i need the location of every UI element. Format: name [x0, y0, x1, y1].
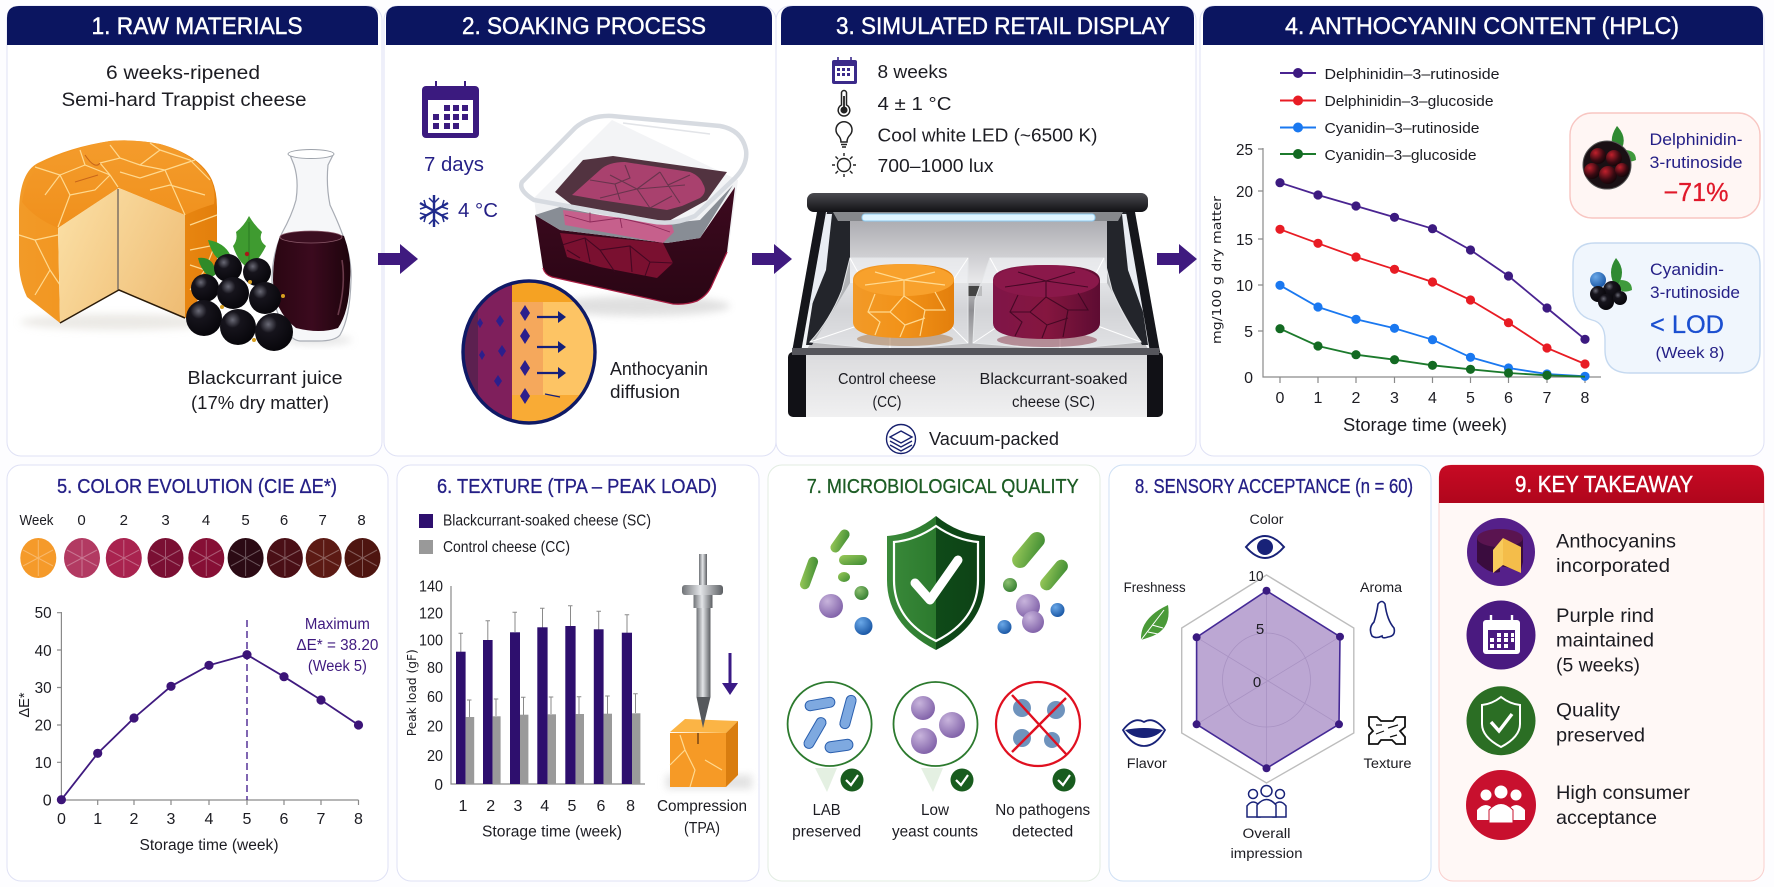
line chart: delta E over storage: 3 [167, 811, 176, 828]
colour swatches: cheese discs by week [20, 538, 381, 578]
arrow: retail display to HPLC [1157, 244, 1197, 274]
annotation: maximum delta E: ΔE* = 38.20 [296, 637, 379, 654]
line chart: delta E over storage: 0 [43, 792, 52, 810]
line chart: delta E over storage [17, 605, 363, 854]
line chart: delta E over storage: 6 [280, 811, 289, 828]
line chart: anthocyanin content over storage: 0 [1276, 390, 1285, 407]
text: takeaway 4 [1556, 782, 1691, 829]
radar axis: freshness [1124, 580, 1186, 640]
text: takeaway 2: (5 weeks) [1556, 655, 1640, 677]
icon: light bulb [836, 122, 852, 147]
icon: anthocyanins incorporated [1467, 518, 1535, 586]
line chart: anthocyanin content over storage: 20 [1236, 184, 1253, 201]
bar chart: peak load: 4 [540, 798, 549, 815]
radar axis: overall impression [1230, 786, 1302, 861]
illustration: anthocyanin diffusion magnifier [460, 280, 598, 425]
radar axis: freshness: Freshness [1124, 580, 1186, 595]
icon: red-tinted berries [1583, 126, 1636, 189]
text: diffusion label [610, 359, 708, 402]
text: takeaway 2 [1556, 605, 1654, 677]
week labels: 4 [202, 512, 210, 529]
radar axis: overall impression: Overall [1242, 826, 1290, 841]
line chart: anthocyanin content over storage: 5 [1244, 324, 1253, 341]
week labels: 8 [357, 512, 366, 529]
line chart: delta E over storage: 4 [205, 811, 214, 828]
illustration: blackcurrant juice carafe [272, 150, 352, 345]
line chart: delta E over storage: 8 [354, 811, 363, 828]
text: compression label: (TPA) [684, 820, 720, 837]
bar chart: peak load: 60 [427, 689, 443, 706]
text: microbiology labels: LAB [813, 802, 841, 819]
bar chart: peak load: 6 [597, 798, 606, 815]
line chart: anthocyanin content over storage: 8 [1581, 390, 1590, 407]
line chart: delta E over storage: 50 [35, 605, 52, 622]
series: cyanidin-3-glucoside [1275, 324, 1585, 380]
panel: 3. simulated retail display [776, 6, 1196, 456]
text: microbiology labels: No pathogens [995, 802, 1090, 819]
text: delphinidin reduction value [1650, 130, 1742, 207]
radar axis: texture [1364, 717, 1412, 771]
text: takeaway 3: Quality [1556, 700, 1620, 722]
week labels: 2 [120, 512, 128, 529]
legend: texture bars: Blackcurrant-soaked cheese (SC) [443, 512, 651, 530]
arrow: soaking to retail display [752, 244, 792, 274]
icon: quality shield [1466, 686, 1536, 755]
legend: anthocyanin series: Delphinidin–3–rutinoside [1324, 66, 1500, 83]
heading: anthocyanin content: 4. ANTHOCYANIN CONTENT (HPLC) [1285, 13, 1679, 40]
week labels [20, 512, 366, 529]
icon: thermometer [838, 90, 850, 116]
radar axis: color: Color [1250, 512, 1284, 527]
text: display labels: (CC) [872, 394, 902, 411]
bar chart: peak load: 3 [514, 798, 523, 815]
text: takeaway 4: High consumer [1556, 782, 1691, 804]
legend: anthocyanin series: Cyanidin–3–rutinoside [1324, 120, 1480, 137]
line chart: anthocyanin content over storage: 25 [1236, 142, 1253, 159]
callout: delphinidin reduction [1570, 113, 1760, 218]
text: takeaway 4: acceptance [1556, 807, 1657, 829]
panel: 8. sensory acceptance [1109, 465, 1431, 881]
icon: vacuum-packed layers [886, 424, 916, 454]
line chart: delta E over storage: 40 [35, 643, 52, 660]
annotation: maximum delta E: (Week 5) [308, 658, 367, 675]
line chart: anthocyanin content over storage: 2 [1352, 390, 1361, 407]
heading: simulated retail display: 3. SIMULATED RETAIL DISPLAY [836, 13, 1170, 40]
panel: 9. key takeaway [1439, 465, 1764, 881]
icon: no pathogens [996, 682, 1080, 792]
radar axis: flavor: Flavor [1127, 756, 1167, 771]
text: microbiology labels: preserved [792, 824, 861, 841]
illustration: cheese wheel with cut wedge [19, 140, 220, 330]
text: delphinidin reduction value: Delphinidin- [1650, 130, 1742, 149]
text: cheese description [62, 62, 306, 111]
bar chart: peak load: 140 [419, 578, 443, 596]
panel: 5. color evolution [7, 465, 388, 881]
line chart: anthocyanin content over storage: 15 [1236, 232, 1253, 249]
legend: anthocyanin series: Delphinidin–3–glucoside [1324, 93, 1494, 110]
radar axis: color [1246, 512, 1284, 558]
legend: texture bars: Control cheese (CC) [443, 539, 570, 556]
text: LED type: Cool white LED (~6500 K) [878, 124, 1098, 146]
bar chart: peak load: 20 [427, 748, 443, 765]
icon: purple rind calendar [1466, 600, 1536, 670]
line chart: anthocyanin content over storage: mg/100 g dry matter [1209, 195, 1224, 344]
bar chart: peak load: 120 [419, 606, 443, 622]
legend: anthocyanin series [1280, 66, 1500, 164]
radar axis: texture: Texture [1364, 756, 1412, 771]
line chart: delta E over storage: 5 [243, 811, 252, 828]
icon: microbes left group [798, 527, 872, 635]
text: cyanidin below LOD value: < LOD [1650, 311, 1724, 339]
text: juice label [188, 367, 342, 413]
text: takeaway 1 [1556, 531, 1676, 577]
arrow: compression direction [722, 653, 738, 695]
text: takeaway 2: maintained [1556, 630, 1654, 652]
text: microbiology labels [792, 802, 1090, 841]
radar axis: aroma [1360, 580, 1403, 638]
legend: anthocyanin series: Cyanidin–3–glucoside [1324, 147, 1476, 164]
icon: calendar 7 days [422, 81, 479, 138]
line chart: anthocyanin content over storage: 3 [1390, 390, 1399, 407]
line chart: anthocyanin content over storage: Storage time (week) [1343, 414, 1507, 435]
annotation: maximum delta E: Maximum [305, 616, 370, 633]
week labels: 5 [241, 512, 250, 529]
text: display labels [838, 371, 1128, 411]
text: juice label: (17% dry matter) [191, 392, 329, 413]
radar chart: sensory scores [1182, 568, 1354, 783]
panel: 2. soaking process [384, 6, 776, 456]
heading: raw materials: 1. RAW MATERIALS [92, 13, 302, 40]
line chart: delta E over storage: Storage time (week) [140, 837, 278, 854]
text: compression label: Compression [657, 798, 747, 815]
bar chart: peak load: 80 [427, 660, 443, 677]
series: delphinidin-3-glucoside [1275, 225, 1590, 369]
icon: LAB preserved [788, 682, 872, 792]
line chart: anthocyanin content over storage: 7 [1543, 390, 1552, 407]
text: takeaway 1: Anthocyanins [1556, 531, 1676, 553]
line chart: delta E over storage: 1 [93, 811, 102, 828]
week labels: 3 [161, 512, 170, 529]
panel: 6. texture [397, 465, 759, 881]
bar chart: peak load: 2 [486, 798, 495, 815]
line chart: anthocyanin content over storage: 10 [1236, 278, 1253, 295]
bar chart: peak load: Peak load (gF) [405, 649, 419, 736]
panel: 4. anthocyanin content [1200, 6, 1764, 456]
line chart: delta E over storage: 30 [35, 680, 52, 697]
bar chart: peak load: 1 [459, 798, 468, 815]
line chart: anthocyanin content over storage: 0 [1244, 370, 1253, 387]
illustration: retail display case [788, 193, 1163, 417]
radar chart: sensory scores: 5 [1256, 621, 1264, 638]
heading: simulated retail display [781, 6, 1194, 45]
text: diffusion label: Anthocyanin [610, 359, 708, 379]
illustration: compression probe on cheese cube [666, 554, 752, 789]
radar axis: flavor [1123, 720, 1167, 771]
text: compression label [657, 798, 747, 837]
line chart: anthocyanin content over storage: 1 [1314, 390, 1323, 407]
text: soaking temperature: 4 °C [458, 200, 498, 222]
heading: color evolution: 5. COLOR EVOLUTION (CIE ΔE*) [57, 476, 337, 498]
line chart: delta E over storage: 7 [317, 811, 326, 828]
bar chart: peak load: 8 [626, 798, 635, 815]
text: cyanidin below LOD value: (Week 8) [1656, 345, 1724, 362]
bar chart: peak load: 100 [419, 632, 443, 650]
icon: sun [832, 153, 856, 177]
illustration: blackcurrant cluster [186, 216, 293, 351]
icon: microbes right group [998, 529, 1071, 634]
illustration: cheese soaking in clear tub [521, 116, 746, 316]
text: takeaway 1: incorporated [1556, 555, 1670, 577]
week labels: Week [20, 512, 54, 529]
line chart: delta E over storage: 0 [57, 811, 66, 828]
icon: low yeast counts [894, 682, 978, 792]
text: delphinidin reduction value: −71% [1664, 177, 1728, 207]
bar chart: peak load [405, 578, 645, 841]
heading: raw materials [7, 6, 378, 45]
arrow: raw materials to soaking [378, 244, 418, 274]
icon: snowflake [420, 195, 448, 227]
heading: soaking process [386, 6, 772, 45]
panel: 7. microbiological quality [768, 465, 1100, 881]
text: diffusion label: diffusion [610, 382, 680, 402]
text: cyanidin below LOD value: 3-rutinoside [1650, 283, 1740, 302]
heading: texture: 6. TEXTURE (TPA – PEAK LOAD) [437, 476, 717, 498]
series: cyanidin-3-rutinoside [1275, 281, 1590, 381]
week labels: 6 [280, 512, 288, 529]
series: delphinidin-3-rutinoside [1275, 178, 1590, 344]
text: microbiology labels: yeast counts [892, 824, 978, 841]
bar chart: peak load: Storage time (week) [482, 824, 622, 841]
text: display labels: Control cheese [838, 371, 936, 388]
text: cheese description: Semi-hard Trappist cheese [62, 89, 306, 111]
radar axis: aroma: Aroma [1360, 580, 1403, 595]
heading: microbiological quality: 7. MICROBIOLOGICAL QUALITY [807, 476, 1079, 498]
heading: sensory acceptance: 8. SENSORY ACCEPTANCE (n = 60) [1135, 476, 1413, 498]
heading: anthocyanin content [1203, 6, 1763, 45]
icon: consumer acceptance people [1466, 770, 1536, 840]
icon: calendar 8 weeks [832, 57, 857, 84]
text: takeaway 2: Purple rind [1556, 605, 1654, 627]
radar chart: sensory scores: 0 [1253, 674, 1261, 691]
heading: key takeaway [1439, 465, 1764, 503]
line chart: delta E over storage: 10 [35, 755, 52, 772]
line chart: delta E over storage: 20 [35, 718, 52, 734]
text: cyanidin below LOD value [1650, 260, 1740, 362]
text: takeaway 3: preserved [1556, 725, 1645, 747]
line chart: anthocyanin content over storage: 5 [1466, 390, 1475, 407]
text: delphinidin reduction value: 3-rutinoside [1650, 153, 1742, 172]
text: cheese description: 6 weeks-ripened [106, 62, 260, 84]
bar chart: peak load: 5 [568, 798, 577, 815]
week labels: 7 [319, 512, 327, 529]
heading: soaking process: 2. SOAKING PROCESS [462, 13, 706, 40]
text: cyanidin below LOD value: Cyanidin- [1650, 260, 1724, 279]
legend: texture bars [419, 512, 651, 556]
annotation: maximum delta E [296, 616, 379, 675]
icon: green shield with check [887, 516, 985, 650]
radar axis: overall impression: impression [1230, 846, 1302, 861]
line chart: anthocyanin content over storage [1209, 142, 1601, 435]
bar chart: peak load: 20 [427, 718, 443, 736]
line chart: delta E over storage: ΔE* [17, 692, 33, 718]
text: microbiology labels: detected [1012, 824, 1073, 841]
text: illuminance: 700–1000 lux [878, 155, 994, 176]
line chart: anthocyanin content over storage: 6 [1504, 390, 1513, 407]
icon: dark berries [1590, 258, 1632, 310]
text: juice label: Blackcurrant juice [188, 367, 342, 388]
heading: key takeaway: 9. KEY TAKEAWAY [1515, 471, 1693, 497]
callout: cyanidin below LOD [1573, 243, 1760, 373]
text: takeaway 3 [1556, 700, 1645, 747]
text: display duration: 8 weeks [878, 61, 948, 82]
radar chart: sensory scores: 10 [1248, 568, 1264, 585]
bar chart: peak load: 0 [434, 777, 443, 794]
text: display labels: cheese (SC) [1012, 394, 1095, 411]
line chart: delta E over storage: 2 [130, 811, 139, 828]
text: display labels: Blackcurrant-soaked [980, 371, 1128, 388]
week labels: 0 [77, 512, 86, 529]
text: display temperature: 4 ± 1 °C [878, 93, 952, 114]
line chart: anthocyanin content over storage: 4 [1428, 390, 1437, 407]
text: vacuum-packed: Vacuum-packed [929, 428, 1059, 449]
text: microbiology labels: Low [921, 802, 950, 819]
panel: 1. raw materials [7, 6, 382, 456]
text: duration: 7 days [424, 154, 484, 176]
